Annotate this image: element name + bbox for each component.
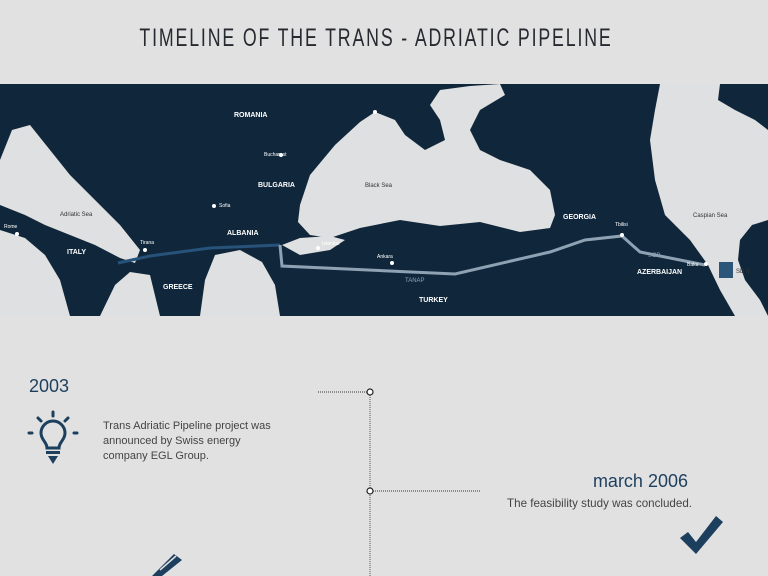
heading: march 2006: march 2006 xyxy=(593,471,688,491)
map: Caspian Sea xyxy=(693,213,728,219)
text: 2006 event: The feasibility study was concluded. xyxy=(507,497,692,510)
map: GREECE xyxy=(163,284,193,291)
map: Bucharest xyxy=(264,152,287,158)
text: 2003 event: Trans Adriatic Pipeline project was announced by Swiss energy company EGL Group. xyxy=(103,420,271,462)
map: Adriatic Sea xyxy=(60,212,93,218)
map: Ankara xyxy=(377,254,393,260)
pipeline TAP xyxy=(118,245,280,263)
map: TURKEY xyxy=(419,297,448,304)
map: SCP xyxy=(648,253,660,259)
map: GEORGIA xyxy=(563,214,596,221)
icon: checkmark xyxy=(680,516,723,554)
map: Tirana xyxy=(140,240,154,246)
heading: 2003: 2003 xyxy=(29,376,69,396)
map: ROMANIA xyxy=(234,112,267,119)
map: SD II xyxy=(736,269,750,275)
title: TIMELINE OF THE TRANS - ADRIATIC PIPELINE xyxy=(139,24,613,52)
icon: pencil xyxy=(152,554,182,576)
map xyxy=(0,84,768,316)
map: ALBANIA xyxy=(227,230,258,237)
map: Tbilisi xyxy=(615,222,628,228)
map: Sofia xyxy=(219,203,231,209)
map: Baku xyxy=(687,262,699,268)
map: ITALY xyxy=(67,249,86,256)
map: TANAP xyxy=(405,278,425,284)
map: BULGARIA xyxy=(258,182,295,189)
map: Rome xyxy=(4,224,18,230)
map: AZERBAIJAN xyxy=(637,269,682,276)
map: Istanbul xyxy=(322,241,340,247)
map: Black Sea xyxy=(365,183,393,189)
timeline connector xyxy=(318,388,480,576)
icon: lightbulb xyxy=(28,410,78,464)
pipeline TANAP/SCP xyxy=(280,236,705,274)
